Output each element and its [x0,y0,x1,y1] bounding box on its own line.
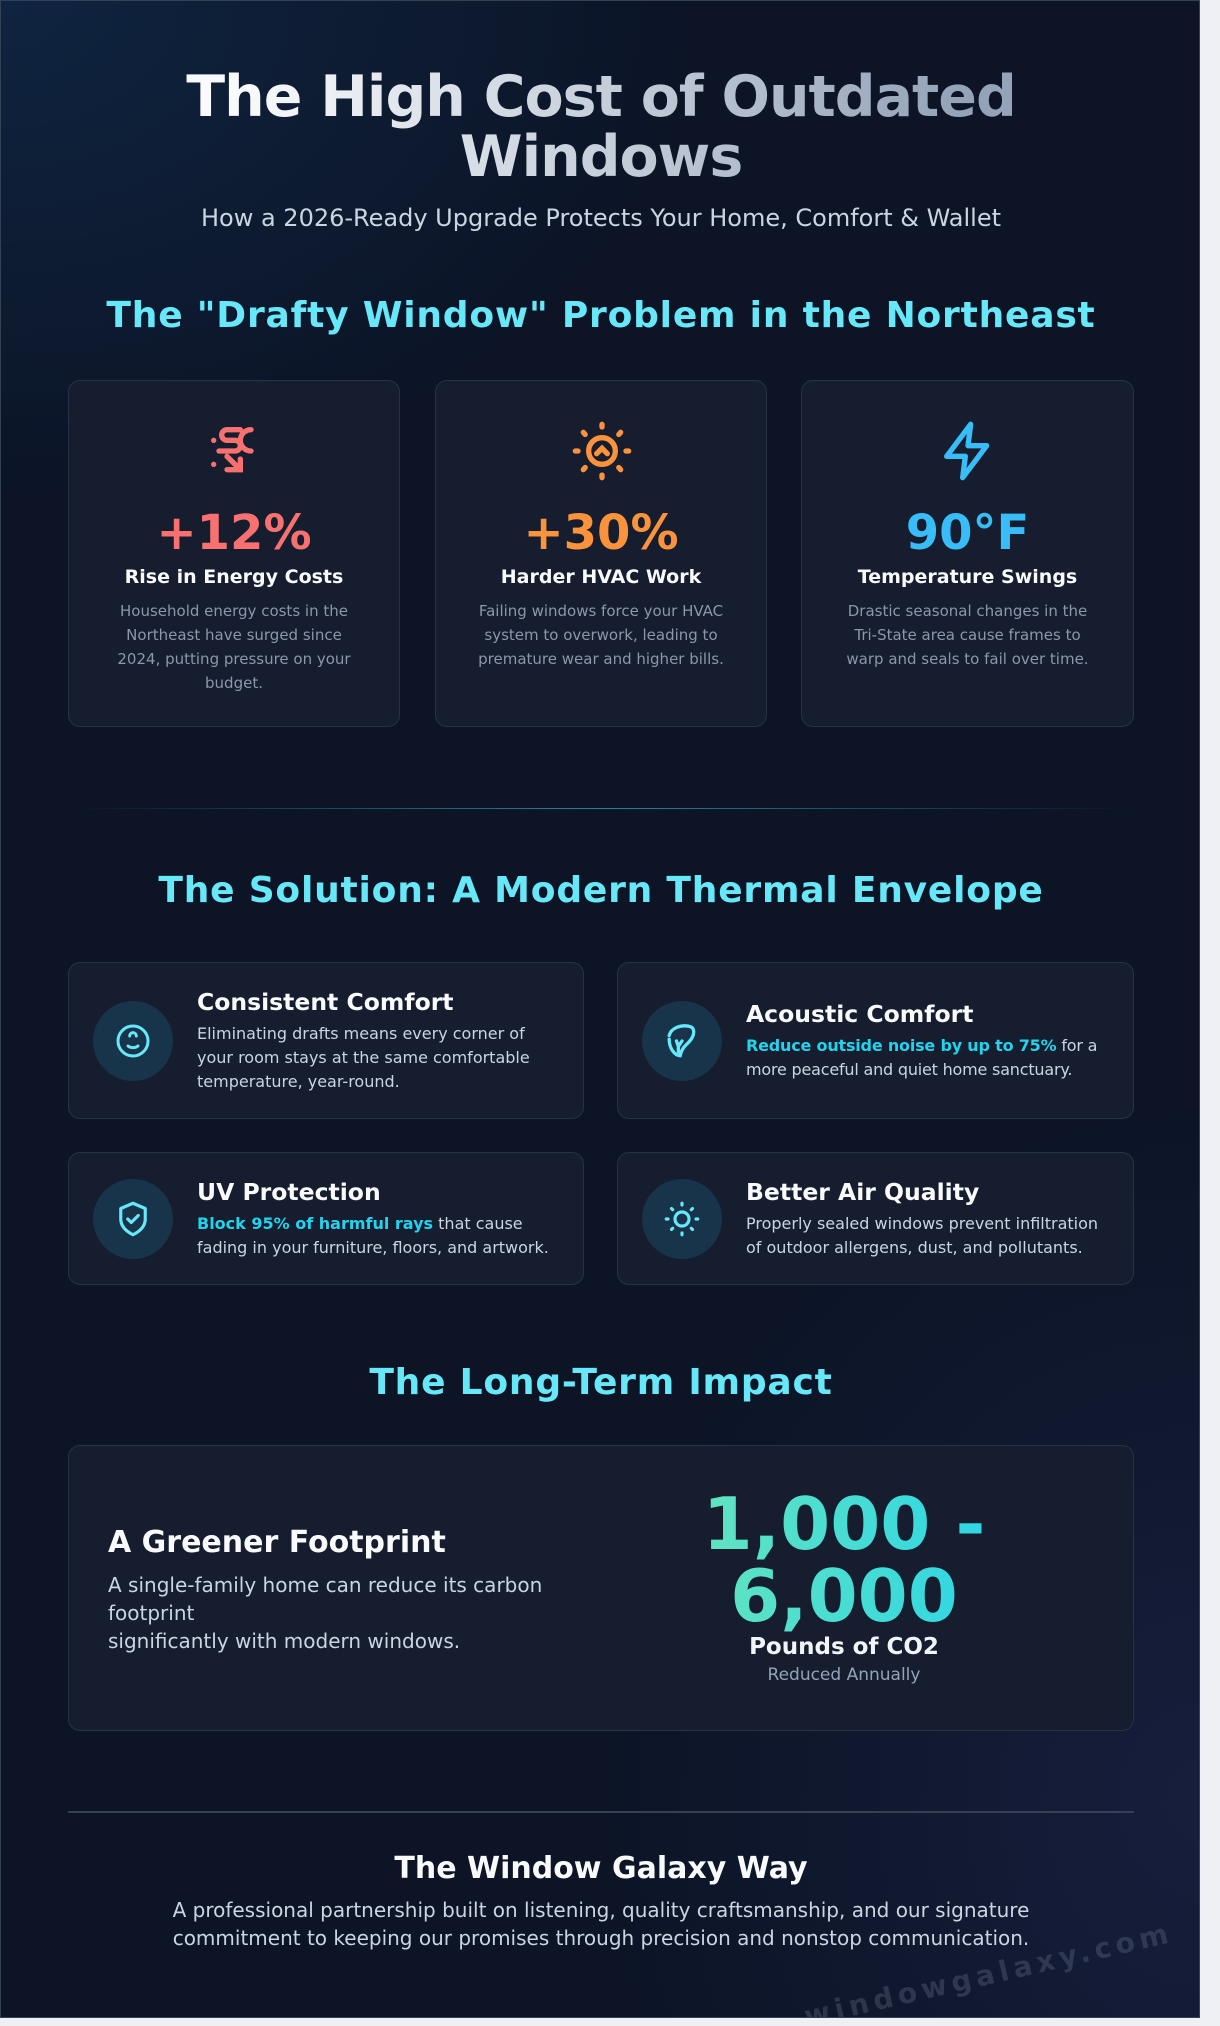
panel: air quality [617,1152,1134,1285]
big stat: Pounds of CO2 [749,1634,939,1660]
heading: solution: The Solution: A Modern Thermal Envelope [158,870,1044,911]
text: Eliminating drafts means every corner of your room stays at the same comfortable temperature, year-round. [197,1024,530,1090]
left text: A Greener Footprint [108,1525,446,1560]
text: Acoustic Comfort [746,1000,973,1028]
icon: sun small [642,1178,722,1258]
description: Drastic seasonal changes in the Tri-State area cause frames to warp and seals to fail over time. [846,602,1089,668]
big stat: 6,000 [730,1554,958,1638]
left text: significantly with modern windows. [108,1629,460,1653]
left text: A single-family home can reduce its carbon footprint [108,1573,542,1625]
text: Properly sealed windows prevent infiltration of outdoor allergens, dust, and pollutants. [746,1214,1098,1256]
icon: sun [572,422,632,480]
description: Household energy costs in the Northeast have surged since 2024, putting pressure on your budget. [117,602,351,692]
description: Failing windows force your HVAC system to overwork, leading to premature wear and higher bills. [478,602,724,668]
icon: lightning [944,422,990,480]
icon: smile [93,1000,173,1080]
big stat [703,1482,985,1685]
stat: +30%: +30% [523,505,679,561]
icon: dollar cost [211,427,254,472]
text: Block 95% of harmful rays that cause fading in your furniture, floors, and artwork. [197,1214,549,1256]
stat: 90°F: 90°F [906,505,1029,561]
text: Better Air Quality [746,1178,979,1206]
heading: long-term impact: The Long-Term Impact [369,1362,833,1403]
text [197,1178,549,1256]
text [746,1178,1098,1256]
label: Harder HVAC Work [501,566,701,588]
icon: ear [642,1000,722,1080]
title: The High Cost of Outdated [186,64,1016,130]
title: Windows [460,124,742,190]
text: UV Protection [197,1178,381,1206]
panel: temperature [801,380,1134,727]
panel: UV protection [68,1152,584,1285]
footer heading: The Window Galaxy Way [394,1851,808,1886]
panel: HVAC [435,380,767,727]
label: Temperature Swings [858,566,1077,588]
subtitle: How a 2026-Ready Upgrade Protects Your Home, Comfort & Wallet [201,204,1001,232]
text [746,1000,1097,1078]
stat: +12%: +12% [156,505,312,561]
heading: drafty window problem: The "Drafty Window" Problem in the Northeast [106,295,1096,336]
label: Rise in Energy Costs [125,566,343,588]
panel: greener footprint [68,1445,1134,1731]
text [197,988,530,1090]
big stat: 1,000 - [703,1482,985,1566]
left text [108,1525,542,1653]
text: Consistent Comfort [197,988,454,1016]
panel: consistent comfort [68,962,584,1119]
icon: shield [93,1178,173,1258]
big stat: Reduced Annually [768,1665,920,1685]
footer text [172,1898,1029,1950]
panel: acoustic comfort [617,962,1134,1119]
footer text: A professional partnership built on listening, quality craftsmanship, and our signature [173,1898,1029,1922]
panel: energy costs [68,380,400,727]
text: Reduce outside noise by up to 75% for a more peaceful and quiet home sanctuary. [746,1036,1097,1078]
footer text: commitment to keeping our promises through precision and nonstop communication. [173,1926,1029,1950]
title [1,67,1201,187]
